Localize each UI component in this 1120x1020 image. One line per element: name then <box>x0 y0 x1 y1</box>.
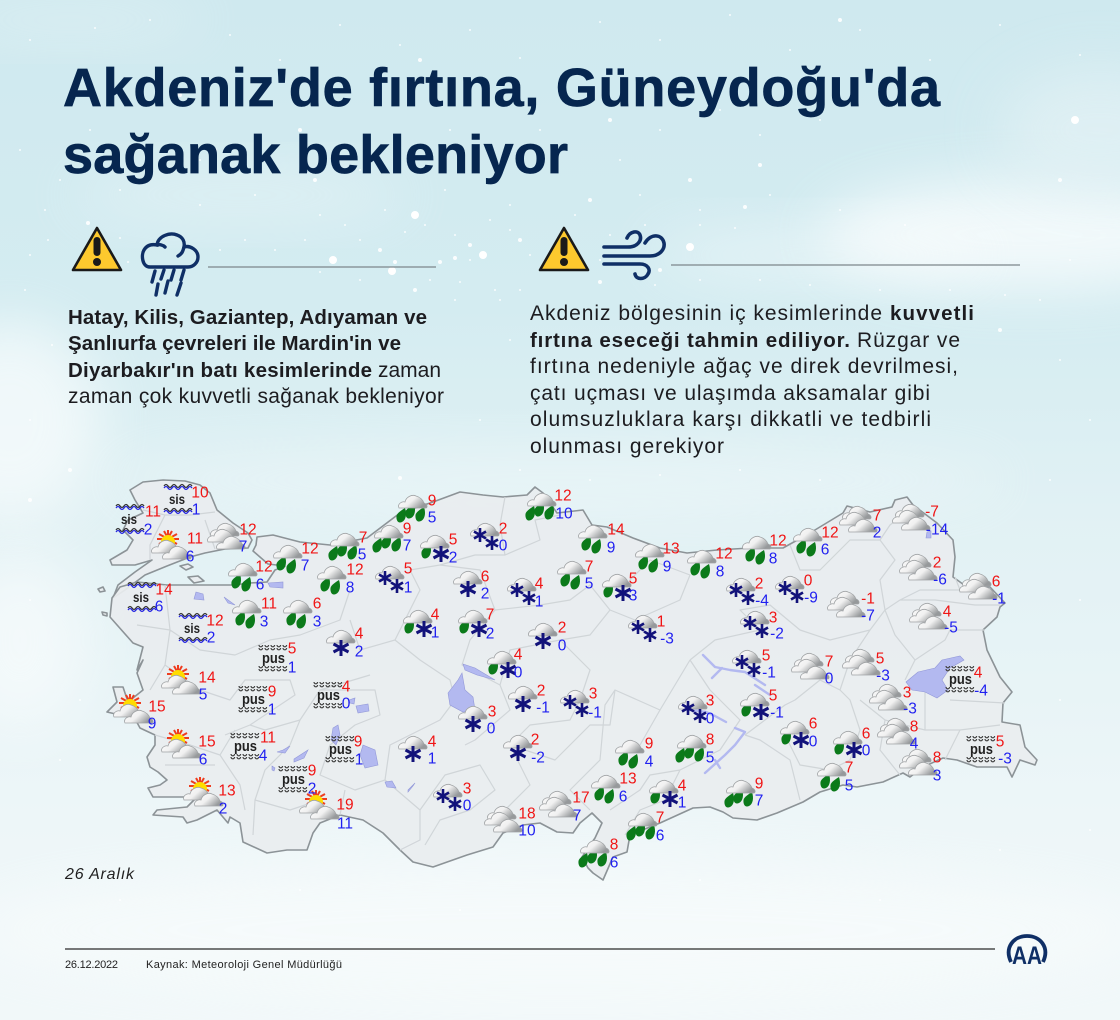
station Edirne region fog: sis <box>169 491 185 507</box>
text block: right warning: olunması gerekiyor <box>530 435 724 458</box>
station snow 6/2: 6 <box>481 568 489 586</box>
station haze 11/4: pus <box>234 738 257 755</box>
station snow 5/1: 5 <box>404 560 412 578</box>
station rain 12/10 <box>525 488 573 522</box>
icon: warning triangle left <box>73 228 121 270</box>
station rain 9/7: 7 <box>403 538 411 554</box>
station rain 12/8: 12 <box>346 562 364 578</box>
station rain 7/5 center <box>558 558 593 592</box>
station snow 2/0: 0 <box>499 538 508 554</box>
station sleet 4/1 Gaziantep: 1 <box>678 794 686 812</box>
station haze 5/1: 5 <box>288 640 296 658</box>
station sleet 5/2 <box>421 532 457 566</box>
station fog 12/2 <box>179 612 224 646</box>
station fog 12/2: 12 <box>206 612 224 630</box>
station haze 9/1 Isparta: 1 <box>355 752 363 768</box>
station cloudy 4/-5: -5 <box>944 620 958 636</box>
station haze 5/1 <box>259 640 296 676</box>
station rain 6/3: 3 <box>313 614 321 630</box>
station haze 4/-4 Van: pus <box>949 671 972 688</box>
station haze 9/1 Isparta: 9 <box>354 734 362 750</box>
station snow 5/-1 <box>733 648 776 682</box>
station snow 3/0 Aksaray: 0 <box>487 720 496 738</box>
station sun 13/2: 2 <box>219 800 227 818</box>
station cloudy 8/3: 8 <box>933 750 941 766</box>
station rain 12/8 east: 8 <box>716 564 724 580</box>
station snow 0/-9: -9 <box>804 590 818 606</box>
station rain 8/6 Hatay: 8 <box>610 836 618 854</box>
station snow 3/0 Karaman <box>434 780 472 814</box>
stations: East <box>724 504 1012 810</box>
station cloudy -1/-7: -7 <box>861 608 875 624</box>
station rain 9/7 Urfa: 7 <box>755 792 763 810</box>
station rain 9/4: 4 <box>645 754 654 770</box>
station rain 12/7: 12 <box>301 540 319 558</box>
station cloudy 8/3: 3 <box>933 768 941 784</box>
station haze 9/1 <box>239 684 276 718</box>
station snow 4/2: 2 <box>355 644 363 660</box>
icon: rain cloud <box>142 234 198 295</box>
station rain 6/3 <box>284 596 321 630</box>
station snow 2/0: 2 <box>499 520 507 538</box>
station snow 1/-3 <box>629 614 674 648</box>
station rain 8/5: 8 <box>706 732 714 748</box>
station cloudy 12/7: 12 <box>239 522 257 538</box>
station snow 2/0 center: 2 <box>558 620 566 636</box>
station snow 1/-3: 1 <box>657 614 665 630</box>
station haze 5/1: 1 <box>288 660 296 676</box>
text block: left warning: Şanlıurfa çevreleri ile Mardin'in ve <box>68 332 401 355</box>
station cloudy 17/7 Adana: 7 <box>573 808 581 824</box>
station rain 7/5 Mardin: 5 <box>845 778 853 794</box>
station haze 9/2 Burdur: 2 <box>308 780 316 798</box>
station snow 5/-1: -1 <box>762 664 776 682</box>
station sun 11/6 <box>152 530 203 566</box>
station rain 7/6 Kilis <box>626 810 664 844</box>
station cloudy -1/-7 <box>828 590 875 624</box>
station haze 9/1: 1 <box>268 702 276 718</box>
station haze 4/0 <box>314 678 351 712</box>
footer date: 26.12.2022 <box>65 959 118 971</box>
station sleet 6/0: 6 <box>809 716 817 732</box>
station haze 4/0: 0 <box>342 696 351 712</box>
station cloudy 17/7 Adana: 17 <box>572 790 590 806</box>
station cloudy 6/-1: -1 <box>992 590 1006 608</box>
station cloudy 8/4: 4 <box>910 736 919 752</box>
station rain 12/6 Artvin <box>794 524 839 558</box>
station sun 19/11: 19 <box>336 796 354 814</box>
station rain 12/6 Artvin: 12 <box>821 524 839 542</box>
station haze 9/2 Burdur: 9 <box>308 762 316 780</box>
station snow 2/-2: 2 <box>531 732 539 748</box>
station sleet 6/0: 0 <box>809 734 818 750</box>
text block: right warning: kuvvetli <box>890 302 974 325</box>
station rain 14/9: 14 <box>607 522 625 538</box>
station sun 14/5: 14 <box>198 670 216 686</box>
text block: right warning: Rüzgar ve <box>857 329 960 352</box>
station cloudy 7/0: 0 <box>825 670 834 688</box>
station haze 11/4: 11 <box>260 730 276 746</box>
station sleet 4/0: 0 <box>514 664 523 682</box>
station sleet 4/1: 1 <box>431 624 439 642</box>
station snow 5/1: 1 <box>404 580 412 596</box>
station fog 14/6: sis <box>133 589 149 605</box>
station sun 11/6: 11 <box>187 530 203 548</box>
text block: right warning <box>530 302 974 458</box>
station haze 9/1 Isparta <box>326 734 363 768</box>
station rain 13/9 <box>636 540 680 576</box>
station haze 4/-4 Van: -4 <box>974 682 988 700</box>
province borders <box>137 497 1005 850</box>
station sun 11/6: 6 <box>186 548 194 566</box>
station cloudy 12/7: 7 <box>239 538 247 556</box>
station sleet 5/2: 5 <box>449 532 457 548</box>
station sun 15/6: 15 <box>198 734 216 750</box>
station haze 9/2 Burdur: pus <box>282 771 305 788</box>
station snow 3/0 Malatya: 0 <box>706 710 715 728</box>
station rain 7/5 center: 5 <box>585 576 593 592</box>
station snow 3/-2: -2 <box>770 626 784 642</box>
station rain 9/5: 5 <box>428 510 436 526</box>
station sleet 7/2: 7 <box>486 606 494 624</box>
station cloudy 6/-1 <box>960 573 1006 608</box>
station haze 5/-3 Hakkari: -3 <box>998 750 1012 768</box>
station cloudy 4/-5: 4 <box>943 604 952 620</box>
text block: left warning: Diyarbakır'ın batı kesimlerinde <box>68 359 372 382</box>
station rain 8/6 Hatay <box>578 836 618 872</box>
station sun 15/9: 15 <box>148 698 166 716</box>
station cloudy 17/7 Adana <box>540 790 590 824</box>
station rain 12/8 <box>318 562 364 596</box>
station rain 14/9 <box>579 522 625 556</box>
station snow 2/-2: -2 <box>531 750 545 766</box>
station snow 2/0 center <box>529 620 567 654</box>
station rain 12/10: 12 <box>554 488 572 504</box>
station haze 5/-3 Hakkari: 5 <box>996 734 1004 750</box>
text block: left warning: zaman çok kuvvetli sağanak bekleniyor <box>68 385 444 408</box>
station sun 19/11 <box>300 790 354 832</box>
station rain 12/8 east: 12 <box>715 546 733 562</box>
station sleet 5/-1: -1 <box>770 704 784 722</box>
station cloudy 5/-3: 5 <box>876 650 884 668</box>
text block: right warning: fırtına eseceği tahmin ediliyor. <box>530 329 850 352</box>
station cloudy 6/-1: 6 <box>992 574 1000 590</box>
station haze 5/-3 Hakkari <box>967 734 1012 768</box>
station rain 9/7 Urfa: 9 <box>755 776 763 792</box>
station cloudy 12/7 <box>208 522 257 556</box>
station rain 12/7: 7 <box>301 558 309 574</box>
station cloudy 8/4 <box>878 718 919 752</box>
station cloudy 7/2: 2 <box>873 524 881 542</box>
station rain 7/6 Kilis: 6 <box>656 828 664 844</box>
station sleet 6/0 Siirt: 6 <box>862 726 870 742</box>
station cloudy 8/4: 8 <box>910 718 918 736</box>
station sleet 7/2: 2 <box>486 626 494 642</box>
station sleet 4/1: 4 <box>431 606 440 624</box>
station rain 13/6 <box>592 770 637 806</box>
icon: wind <box>604 232 664 278</box>
station cloudy -7/-14 <box>893 504 949 538</box>
text block: left warning: zaman <box>378 359 441 382</box>
station fog 11/2: 2 <box>144 522 152 538</box>
station snow 2/0 <box>471 520 508 554</box>
station snow 3/-2: 3 <box>769 610 777 626</box>
station cloudy 2/-6: -6 <box>933 572 947 588</box>
station rain 12/8: 8 <box>346 580 354 596</box>
station snow 6/2: 2 <box>481 586 489 602</box>
station haze 11/4: 4 <box>259 748 268 764</box>
station snow 3/0 Karaman: 3 <box>463 780 471 798</box>
station snow 4/1 Konya: 4 <box>428 734 437 750</box>
station snow 4/1 Konya <box>399 734 437 768</box>
station snow 4/2 <box>327 626 364 660</box>
station cloudy 7/0 <box>792 653 834 688</box>
station haze 5/-3 Hakkari: pus <box>970 741 993 758</box>
station haze 9/1 Isparta: pus <box>329 741 352 758</box>
station snow 3/0 Aksaray <box>459 704 496 738</box>
station cloudy 7/0: 7 <box>825 654 833 670</box>
station rain 7/5: 7 <box>359 530 367 546</box>
station rain 12/8 Rize <box>743 532 787 568</box>
station rain 7/5 center: 7 <box>585 558 593 576</box>
station rain 12/10: 10 <box>555 506 573 522</box>
station cloudy 4/-5 <box>910 603 958 636</box>
station rain 14/9: 9 <box>607 540 615 556</box>
station rain 9/7 <box>372 520 411 554</box>
station rain 8/5: 5 <box>706 750 714 766</box>
station rain 8/6 Hatay: 6 <box>610 854 618 872</box>
station rain 13/6: 13 <box>619 770 637 788</box>
station haze 5/1: pus <box>262 650 285 667</box>
station sun 13/2 <box>184 777 236 818</box>
station cloudy 2/-6: 2 <box>933 554 941 572</box>
station snow 4/1 Konya: 1 <box>428 750 436 768</box>
text block: right warning: olumsuzluklara karşı dikkatli ve tedbirli <box>530 408 931 431</box>
station cloudy -7/-14: -14 <box>926 522 949 538</box>
station snow 2/-4 <box>727 576 769 610</box>
station rain 12/7 <box>274 540 319 574</box>
station snow 2/-1 <box>509 682 550 716</box>
station sleet 5/-1 <box>741 688 784 722</box>
station snow 3/0 Karaman: 0 <box>463 798 472 814</box>
station cloudy 5/-3: -3 <box>876 668 890 684</box>
station rain 12/8 east <box>688 546 733 580</box>
station fog 11/2: sis <box>121 511 137 527</box>
footer source: Kaynak: Meteoroloji Genel Müdürlüğü <box>146 959 342 971</box>
station sleet 6/0 <box>781 716 818 750</box>
icon: warning triangle right <box>540 228 588 270</box>
station rain 9/7 Urfa <box>724 776 763 810</box>
station rain 9/7: 9 <box>403 520 411 538</box>
station snow 0/-9 <box>776 572 818 606</box>
station sleet 7/2 <box>459 606 494 642</box>
station sun 15/6 <box>162 729 216 768</box>
station sleet 5/2: 2 <box>449 550 457 566</box>
station snow 2/-4: -4 <box>755 592 769 610</box>
station sleet 4/1 <box>404 606 440 642</box>
station rain 9/5: 9 <box>428 492 436 510</box>
station rain 13/9: 13 <box>662 540 680 558</box>
station rain 11/3: 11 <box>261 596 277 612</box>
station haze 11/4 <box>231 730 276 764</box>
station rain 11/3 <box>233 596 277 630</box>
station haze 9/1: 9 <box>268 684 276 700</box>
station rain 12/6: 12 <box>255 558 273 576</box>
lakes and reservoirs <box>194 531 964 792</box>
station Edirne region fog <box>164 484 209 518</box>
station cloudy 2/-6 <box>900 554 947 588</box>
station rain 9/5 <box>396 492 436 526</box>
station snow 3/-1: -1 <box>588 704 602 722</box>
text block: right warning: fırtına nedeniyle ağaç ve direk devrilmesi, <box>530 355 958 378</box>
station snow 2/-4: 2 <box>755 576 763 592</box>
stations: Aegean and Mediterranean west <box>114 640 363 832</box>
station rain 13/6: 6 <box>619 788 627 806</box>
station snow 2/-1: 2 <box>537 682 545 700</box>
station cloudy -1/-7: -1 <box>861 590 875 608</box>
station sun 15/9: 9 <box>148 716 156 732</box>
station sleet 5/-1: 5 <box>769 688 777 704</box>
station rain 7/6 Kilis: 7 <box>656 810 664 826</box>
station haze 9/2 Burdur <box>279 762 316 798</box>
station snow 3/-1: 3 <box>589 686 597 702</box>
station snow 1/-3: -3 <box>660 630 674 648</box>
station fog 14/6: 14 <box>155 582 173 598</box>
station rain 12/8 Rize: 8 <box>769 550 777 568</box>
text block: right warning: çatı uçması ve ulaşımda aksamalar gibi <box>530 382 930 405</box>
station rain 7/5 Mardin <box>818 760 853 794</box>
text block: left warning: Hatay, Kilis, Gaziantep, Adıyaman ve <box>68 306 427 329</box>
station rain 7/5 Mardin: 7 <box>845 760 853 776</box>
station snow 4/1: 4 <box>535 576 544 592</box>
station snow 2/-1: -1 <box>536 700 550 716</box>
station rain 12/6 <box>229 558 273 594</box>
station rain 8/5 <box>675 732 714 766</box>
station cloudy 3/-3: 3 <box>903 684 911 702</box>
station Edirne region fog: 1 <box>192 502 200 518</box>
station snow 4/1 <box>508 576 544 610</box>
station haze 4/0: pus <box>317 687 340 704</box>
station sun 19/11: 11 <box>337 816 353 832</box>
station rain 13/9: 9 <box>663 558 671 576</box>
station snow 4/1: 1 <box>535 594 543 610</box>
station sleet 6/0 Siirt: 0 <box>862 742 871 760</box>
station rain 9/4: 9 <box>645 736 653 752</box>
station cloudy 18/10 Mersin <box>485 806 536 840</box>
station snow 0/-9: 0 <box>804 572 813 590</box>
station fog 11/2: 11 <box>145 504 161 520</box>
station snow 3/0 Malatya <box>679 692 715 728</box>
station sun 15/6: 6 <box>199 752 207 768</box>
station fog 12/2: 2 <box>207 630 215 646</box>
station cloudy 18/10 Mersin: 10 <box>518 822 536 840</box>
station sleet 5/3: 5 <box>629 570 637 588</box>
station sun 14/5: 5 <box>199 686 207 704</box>
station haze 9/1: pus <box>242 691 265 708</box>
title <box>63 58 941 185</box>
station snow 2/0 center: 0 <box>558 638 567 654</box>
stations: Black Sea and Central <box>404 488 733 682</box>
title: Akdeniz'de fırtına, Güneydoğu'da <box>63 58 941 118</box>
station rain 11/3: 3 <box>260 614 268 630</box>
station cloudy 8/3 <box>900 749 941 784</box>
station sleet 4/1 Gaziantep: 4 <box>678 778 687 794</box>
station sun 13/2: 13 <box>218 782 236 800</box>
map: Turkey forecast <box>98 480 1037 880</box>
station snow 4/2: 4 <box>355 626 364 642</box>
station rain 9/4 <box>616 736 654 770</box>
station sleet 6/0 Siirt <box>834 726 871 760</box>
station rain 12/6: 6 <box>256 576 264 594</box>
station fog 14/6 <box>128 582 173 616</box>
stations: Thrace and Marmara <box>116 484 436 660</box>
map land outline <box>98 480 1037 880</box>
station cloudy 7/2: 7 <box>873 508 881 524</box>
station snow 3/-2 <box>741 610 784 642</box>
station Edirne region fog: 10 <box>191 484 209 502</box>
station cloudy 3/-3 <box>870 684 917 718</box>
station snow 5/-1: 5 <box>762 648 770 664</box>
stations: South and Central Anatolia <box>399 682 715 872</box>
station snow 2/-2 <box>504 732 545 766</box>
station cloudy 5/-3 <box>843 649 890 684</box>
station haze 4/-4 Van <box>946 664 988 700</box>
station sleet 5/3: 3 <box>629 588 637 604</box>
station fog 14/6: 6 <box>155 598 163 616</box>
station fog 11/2 <box>116 504 161 538</box>
station sleet 4/0 <box>488 646 523 682</box>
station haze 4/0: 4 <box>342 678 351 696</box>
station snow 3/-1 <box>561 686 602 722</box>
station sleet 4/1 Gaziantep <box>650 778 687 812</box>
station snow 5/1 <box>376 560 412 596</box>
station cloudy 18/10 Mersin: 18 <box>518 806 536 822</box>
station cloudy 7/2 <box>840 506 881 542</box>
station rain 12/8 Rize: 12 <box>769 532 787 550</box>
station sun 14/5 <box>162 665 216 704</box>
station cloudy -7/-14: -7 <box>925 504 939 520</box>
station sleet 4/0: 4 <box>514 646 523 664</box>
text block: right warning: Akdeniz bölgesinin iç kesimlerinde <box>530 302 882 325</box>
station haze 4/-4 Van: 4 <box>974 664 983 682</box>
divider right <box>671 264 1020 266</box>
divider left <box>208 266 436 268</box>
text block: left warning <box>68 306 444 408</box>
station rain 7/5 <box>328 530 367 564</box>
date note: 26 Aralık <box>64 866 135 883</box>
station sun 15/9 <box>114 694 166 732</box>
logo: AA: AA <box>1012 942 1042 970</box>
station rain 7/5: 5 <box>358 546 366 564</box>
station rain 6/3: 6 <box>313 596 321 612</box>
station snow 3/0 Malatya: 3 <box>706 692 714 710</box>
station cloudy 3/-3: -3 <box>903 700 917 718</box>
station fog 12/2: sis <box>184 620 200 636</box>
station snow 6/2 <box>454 568 489 602</box>
footer line <box>65 948 995 950</box>
title: sağanak bekleniyor <box>63 125 568 185</box>
station rain 12/6 Artvin: 6 <box>821 542 829 558</box>
station sleet 5/3 <box>603 570 637 604</box>
station snow 3/0 Aksaray: 3 <box>488 704 496 720</box>
